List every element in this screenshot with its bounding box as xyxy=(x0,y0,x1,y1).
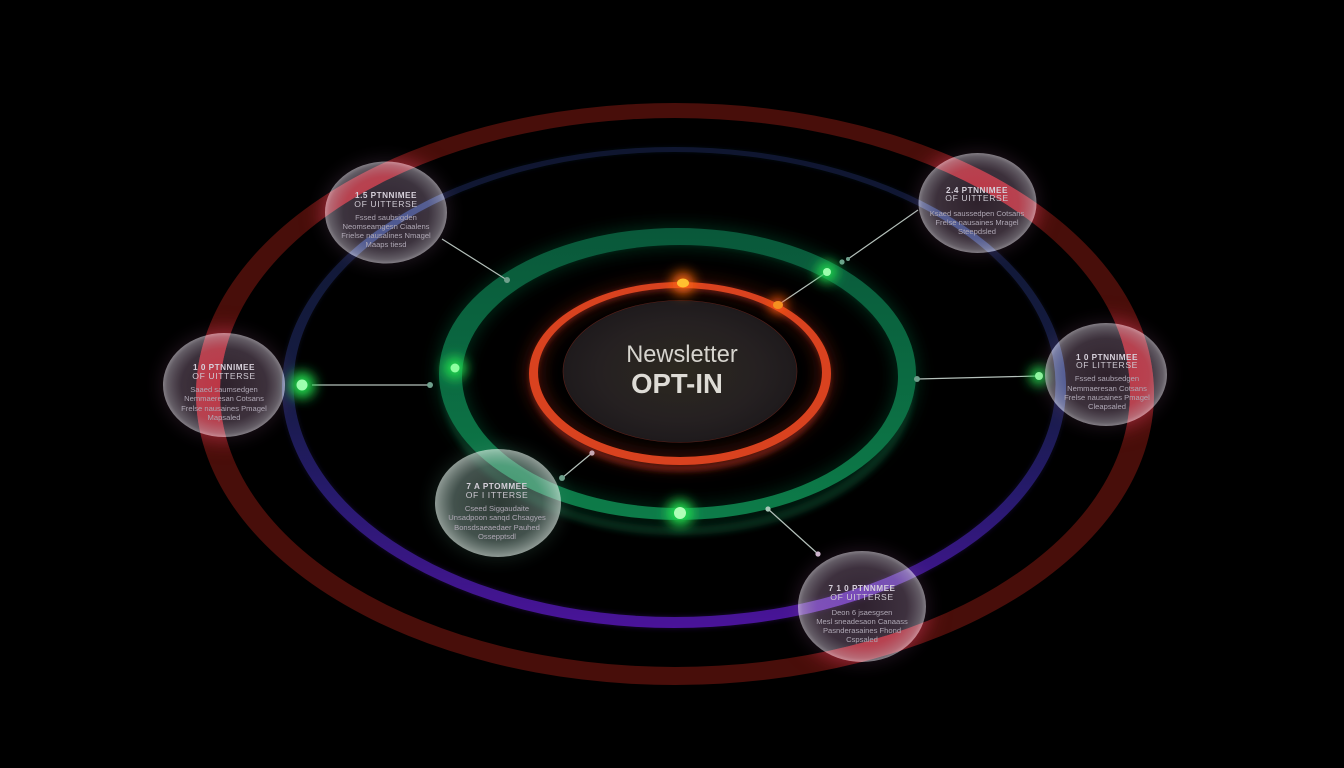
bubble body: Frielse nausalines Nmagel xyxy=(341,231,431,240)
bubble body: Frelse nausaines Mragel xyxy=(935,218,1019,227)
bubble body: Ksaed saussedpen Cotsans xyxy=(930,209,1024,218)
bubble body: Fssed saubsigden xyxy=(355,213,417,222)
center hub: Newsletter OPT-IN xyxy=(563,300,797,442)
bubble body: Pasnderasaines Fhond xyxy=(823,626,901,635)
title: Newsletter: Newsletter xyxy=(626,342,738,368)
bubble heading xyxy=(192,363,256,381)
bubble body: Nemmaeresan Cotsans xyxy=(1067,384,1147,393)
bubble heading xyxy=(466,482,528,500)
bubble heading: OF UITTERSE xyxy=(945,193,1009,203)
bubble halos xyxy=(162,152,1168,662)
bubble body xyxy=(930,209,1024,236)
bubble body: Ossepptsdl xyxy=(478,532,516,541)
rings seen through the bubbles xyxy=(196,158,1154,662)
bubble heading xyxy=(354,191,418,209)
bubble body: Nemmaeresan Cotsans xyxy=(184,394,264,403)
green orbit ring xyxy=(439,228,916,531)
bubble body: Bonsdsaeaedaer Pauhed xyxy=(454,523,540,532)
bubble body: Cseed Siggaudaite xyxy=(465,504,529,513)
connector lines xyxy=(312,210,1038,554)
red-orange inner ring xyxy=(529,282,831,468)
bubble body: Saaed saumsedgen xyxy=(190,385,258,394)
bubble body: Frelse nausaines Pmagel xyxy=(181,404,267,413)
bubble heading xyxy=(945,186,1009,203)
bubble heading: 7 A PTOMMEE xyxy=(466,482,528,491)
bubble body: Cspsaled xyxy=(846,635,878,644)
bubble: top right xyxy=(918,153,1036,253)
bubble heading xyxy=(1076,353,1138,370)
title: OPT-IN: OPT-IN xyxy=(631,368,723,399)
bubble heading: OF UITTERSE xyxy=(192,371,256,381)
glowing orange nodes xyxy=(672,272,786,313)
bubble body xyxy=(341,213,431,249)
bubble heading: OF I ITTERSE xyxy=(466,490,528,500)
bubble body: Unsadpoon sanqd Chsagyes xyxy=(448,513,546,522)
bubble body xyxy=(816,608,908,644)
blue and purple orbit ring xyxy=(282,147,1066,628)
bubble heading: 1.5 PTNNIMEE xyxy=(355,191,417,200)
bubble heading: OF UITTERSE xyxy=(354,199,418,209)
bubble body xyxy=(181,385,267,422)
bubble body xyxy=(448,504,546,541)
bubble heading: 1 0 PTNNIMEE xyxy=(193,363,255,372)
connector end points xyxy=(427,257,920,557)
bubble body: Mesl sneadesaon Canaass xyxy=(816,617,908,626)
bubble heading: OF UITTERSE xyxy=(830,592,894,602)
bubble body: Neomseamgesn Ciaalens xyxy=(343,222,430,231)
outer red orbit ring xyxy=(196,103,1154,685)
bubble: bottom right xyxy=(798,551,926,662)
bubble heading: OF LITTERSE xyxy=(1076,360,1138,370)
bubble heading: 7 1 0 PTNNMEE xyxy=(828,584,896,593)
bubble heading: 2.4 PTNNIMEE xyxy=(946,186,1008,195)
bubble body: Mapsaled xyxy=(208,413,240,422)
bubble body: Deon 6 jsaesgsen xyxy=(832,608,892,617)
bubble heading: 1 0 PTNNIMEE xyxy=(1076,353,1138,362)
bubble body: Maaps tiesd xyxy=(366,240,406,249)
bubble body: Fssed saubsedgen xyxy=(1075,374,1139,383)
bubble: lower center xyxy=(435,449,561,557)
bubble body: Steepdsled xyxy=(958,227,996,236)
bubble heading xyxy=(828,584,896,602)
bubble: top left xyxy=(325,162,447,264)
glowing green nodes xyxy=(289,262,1048,526)
bubble body: Cleapsaled xyxy=(1088,402,1126,411)
bubble: right xyxy=(1045,323,1167,426)
bubble body xyxy=(1064,374,1150,411)
bubble body: Frelse nausaines Pmagel xyxy=(1064,393,1150,402)
bubble: left xyxy=(163,333,285,437)
